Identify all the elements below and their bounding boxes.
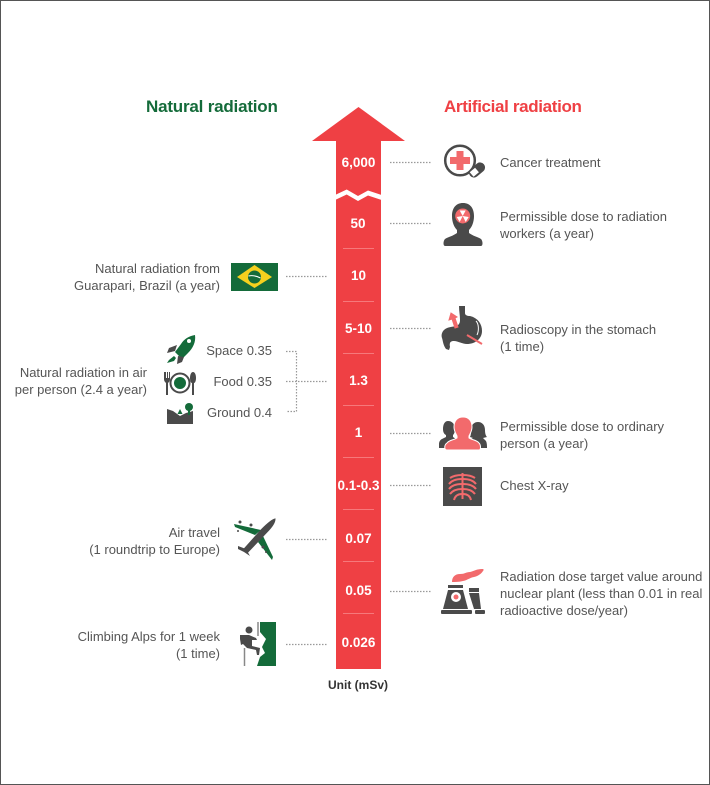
text: space: Space 0.35 bbox=[206, 343, 272, 358]
heading: natural radiation: Natural radiation bbox=[146, 97, 278, 116]
text: ground: Ground 0.4 bbox=[207, 405, 272, 420]
text: guarapari bbox=[74, 261, 220, 293]
text: cancer treatment: Cancer treatment bbox=[500, 155, 600, 170]
text: radioscopy: (1 time) bbox=[500, 339, 544, 354]
text: natural radiation in air bbox=[15, 365, 147, 397]
text: ordinary person: person (a year) bbox=[500, 436, 588, 451]
scale arrow: 10 bbox=[351, 268, 366, 283]
text: climbing alps bbox=[78, 629, 220, 661]
text: radiation workers: Permissible dose to radiation bbox=[500, 209, 667, 224]
text: radioscopy bbox=[500, 322, 656, 354]
text: natural radiation in air: Natural radiation in air bbox=[20, 365, 147, 380]
text: climbing alps: (1 time) bbox=[176, 646, 220, 661]
text: nuclear plant: Radiation dose target value around bbox=[500, 569, 702, 584]
scale arrow: 50 bbox=[350, 216, 366, 231]
text: guarapari: Natural radiation from bbox=[95, 261, 220, 276]
scale arrow: 0.05 bbox=[345, 583, 372, 598]
text: radiation workers: workers (a year) bbox=[500, 226, 594, 241]
scale arrow: 1.3 bbox=[349, 373, 368, 388]
text: guarapari: Guarapari, Brazil (a year) bbox=[74, 278, 220, 293]
scale arrow: 0.026 bbox=[342, 635, 376, 650]
text: climbing alps: Climbing Alps for 1 week bbox=[78, 629, 220, 644]
text: ordinary person bbox=[500, 419, 664, 451]
heading: artificial radiation: Artificial radiation bbox=[444, 97, 582, 116]
text: natural radiation in air: per person (2.4 a year) bbox=[15, 382, 147, 397]
text: ordinary person: Permissible dose to ordinary bbox=[500, 419, 664, 434]
scale arrow: 5-10 bbox=[345, 321, 372, 336]
text: air travel: Air travel bbox=[169, 525, 220, 540]
text: radioscopy: Radioscopy in the stomach bbox=[500, 322, 656, 337]
scale arrow: 0.1-0.3 bbox=[337, 478, 380, 493]
text: air travel bbox=[89, 525, 220, 557]
text: food: Food 0.35 bbox=[213, 374, 272, 389]
text: chest x-ray: Chest X-ray bbox=[500, 478, 569, 493]
text: nuclear plant: radioactive dose/year) bbox=[500, 603, 628, 618]
text: air travel: (1 roundtrip to Europe) bbox=[89, 542, 220, 557]
text: unit: Unit (mSv) bbox=[328, 678, 388, 692]
scale arrow: 6,000 bbox=[342, 155, 375, 170]
scale arrow: 0.07 bbox=[345, 531, 372, 546]
text: nuclear plant bbox=[500, 569, 702, 618]
scale arrow: 1 bbox=[355, 425, 363, 440]
text: radiation workers bbox=[500, 209, 667, 241]
text: nuclear plant: nuclear plant (less than 0.01 in real bbox=[500, 586, 702, 601]
